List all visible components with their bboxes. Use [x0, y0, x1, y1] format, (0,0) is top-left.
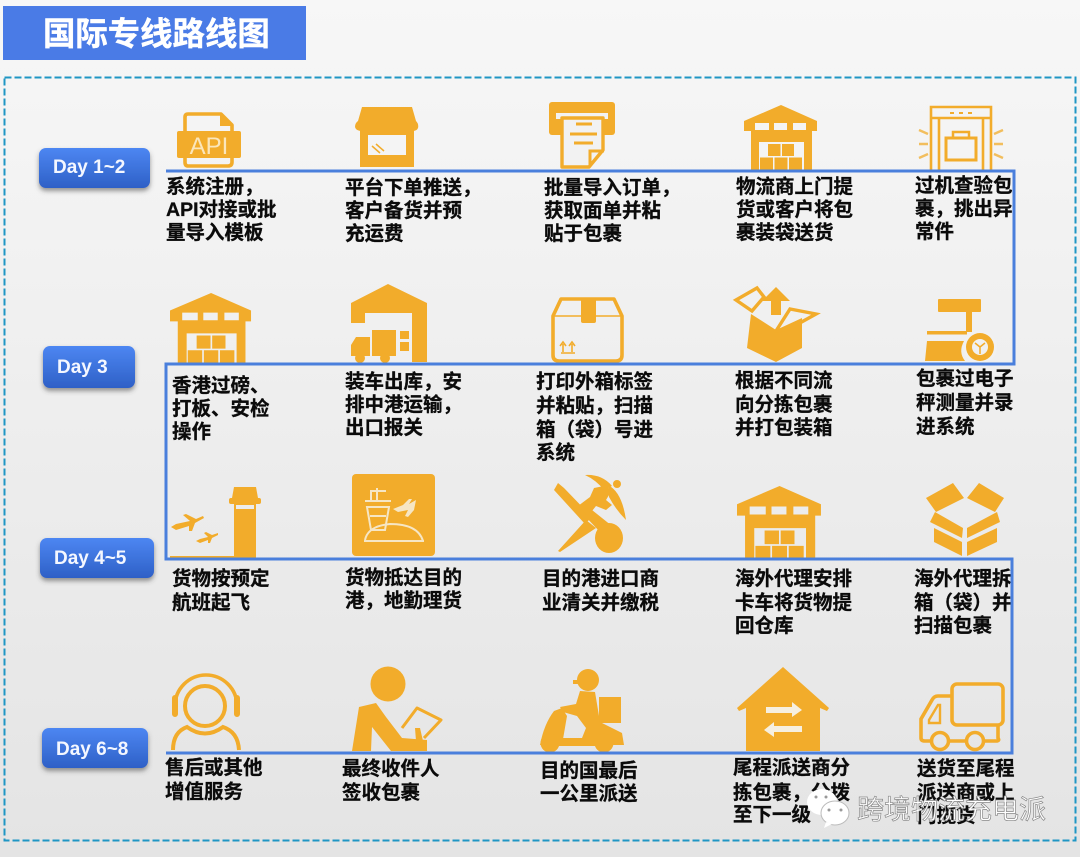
text: 最终收件人 [342, 758, 440, 780]
text: 港，地勤理货 [345, 589, 462, 612]
step: 打印外箱标签 [536, 298, 653, 464]
text: 回仓库 [735, 615, 794, 637]
text: 门揽货 [917, 804, 976, 827]
text: 并打包装箱 [735, 416, 833, 439]
step: 电子秤测量 [916, 299, 1014, 438]
step: 送货至尾程 [917, 684, 1015, 827]
watermark: 跨境物流充电派 [857, 795, 1046, 825]
text: 签收包裹 [342, 782, 420, 804]
step: 分拣包裹 [735, 287, 833, 439]
day badge: Day 3 [43, 346, 135, 388]
text: 获取面单并粘 [544, 199, 661, 222]
text: 系统 [536, 441, 575, 464]
day badge: Day 6~8: Day 6~8 [56, 739, 128, 760]
day badge: Day 4~5 [40, 538, 154, 578]
text: 售后或其他 [165, 756, 263, 779]
text: 目的港进口商 [542, 568, 659, 590]
text: 排中港运输， [345, 393, 462, 416]
text: API对接或批 [166, 198, 277, 221]
step: 最后一公里派送 [540, 669, 638, 805]
icon: parcel box [553, 298, 622, 361]
text: 常件 [915, 221, 954, 243]
day badge: Day 4~5: Day 4~5 [54, 548, 127, 569]
icon: headset agent [173, 675, 239, 750]
step: 过机查验 [915, 107, 1013, 243]
icon: truck leaving warehouse [351, 284, 427, 363]
icon: airport square [352, 474, 435, 556]
text: 航班起飞 [172, 591, 250, 614]
icon: outlined truck [921, 684, 1003, 750]
text: 箱（袋）号进 [536, 419, 653, 441]
icon: warehouse [737, 486, 821, 560]
text: 打印外箱标签 [536, 371, 653, 393]
icon: open box with arrow [736, 287, 816, 362]
title banner [3, 6, 306, 60]
text: 香港过磅、 [172, 375, 270, 397]
text: 批量导入订单， [544, 177, 681, 199]
text: 一公里派送 [540, 783, 638, 805]
step: 海外代理拆箱 [914, 483, 1012, 637]
icon: scale with parcel [925, 299, 997, 364]
day badge: Day 1~2 [39, 148, 150, 188]
step: 收件人签收 [342, 666, 441, 804]
step: 平台下单 [345, 107, 482, 245]
text: 业清关并缴税 [542, 591, 660, 614]
text: 秤测量并录 [916, 391, 1014, 414]
icon: API file: API [190, 133, 228, 160]
title banner: 国际专线路线图 [43, 16, 270, 52]
icon: delivery scooter [540, 669, 624, 752]
text: 尾程派送商分 [733, 757, 850, 779]
text: 扫描包裹 [914, 615, 992, 637]
icon: house with exchange arrows [737, 667, 829, 751]
icon: warehouse [170, 293, 251, 364]
text: 贴于包裹 [544, 223, 622, 245]
text: 派送商或上 [917, 781, 1015, 804]
watermark [807, 789, 1046, 828]
text: 拣包裹，分拨 [733, 782, 851, 804]
icon: shop [355, 107, 418, 167]
text: 货物按预定 [172, 567, 270, 590]
step: 尾程分拣 [733, 667, 851, 826]
step: 货物抵达目的港 [345, 474, 462, 612]
text: 卡车将货物提 [735, 591, 853, 614]
text: 并粘贴，扫描 [536, 394, 653, 417]
icon: control tower and planes [170, 487, 261, 559]
text: 增值服务 [165, 781, 243, 803]
text: 送货至尾程 [917, 757, 1015, 780]
icon: x-ray scanner [919, 107, 1003, 170]
text: 系统注册， [166, 175, 264, 198]
step: 系统注册 [166, 114, 277, 244]
text: 客户备货并预 [345, 199, 463, 222]
text: 货或客户将包 [736, 198, 853, 221]
text: 裹装袋送货 [736, 221, 834, 244]
text: 充运费 [345, 222, 404, 245]
text: 量导入模板 [166, 221, 264, 244]
step: 物流商上门提货 [736, 105, 854, 244]
day badge: Day 6~8 [42, 728, 148, 768]
icon: printer paper [549, 102, 615, 167]
text: 货物抵达目的 [345, 566, 462, 589]
icon: person signing [352, 666, 441, 751]
text: 裹，挑出异 [915, 198, 1013, 220]
icon: open carton [926, 483, 1004, 556]
step: 货物起飞 [170, 487, 270, 614]
route line [166, 171, 1014, 753]
day badge: Day 3: Day 3 [57, 357, 108, 378]
text: 至下一级 [733, 803, 812, 826]
step: 香港过磅 [170, 293, 270, 443]
icon: warehouse [744, 105, 817, 170]
text: 海外代理拆 [914, 568, 1012, 590]
text: 物流商上门提 [736, 175, 854, 198]
text: 包裹过电子 [916, 368, 1014, 390]
step: 售后服务 [165, 675, 263, 803]
text: 进系统 [916, 415, 975, 438]
day badge: Day 1~2: Day 1~2 [53, 157, 125, 178]
text: 目的国最后 [540, 760, 638, 782]
text: 出口报关 [345, 417, 424, 439]
step: 进口清关 [542, 475, 660, 614]
icon: customs emblem [554, 475, 626, 553]
step: 海外代理提货 [735, 486, 853, 637]
text: 箱（袋）并 [914, 591, 1012, 614]
text: 海外代理安排 [735, 568, 852, 590]
text: 装车出库，安 [345, 370, 462, 393]
step: 批量导入 [544, 102, 681, 245]
text: 平台下单推送， [345, 176, 482, 199]
text: 过机查验包 [915, 174, 1013, 197]
text: 操作 [172, 421, 211, 443]
text: 打板、安检 [172, 397, 270, 420]
step: 装车出库 [345, 284, 462, 439]
text: 根据不同流 [735, 370, 833, 392]
text: 向分拣包裹 [735, 394, 833, 416]
